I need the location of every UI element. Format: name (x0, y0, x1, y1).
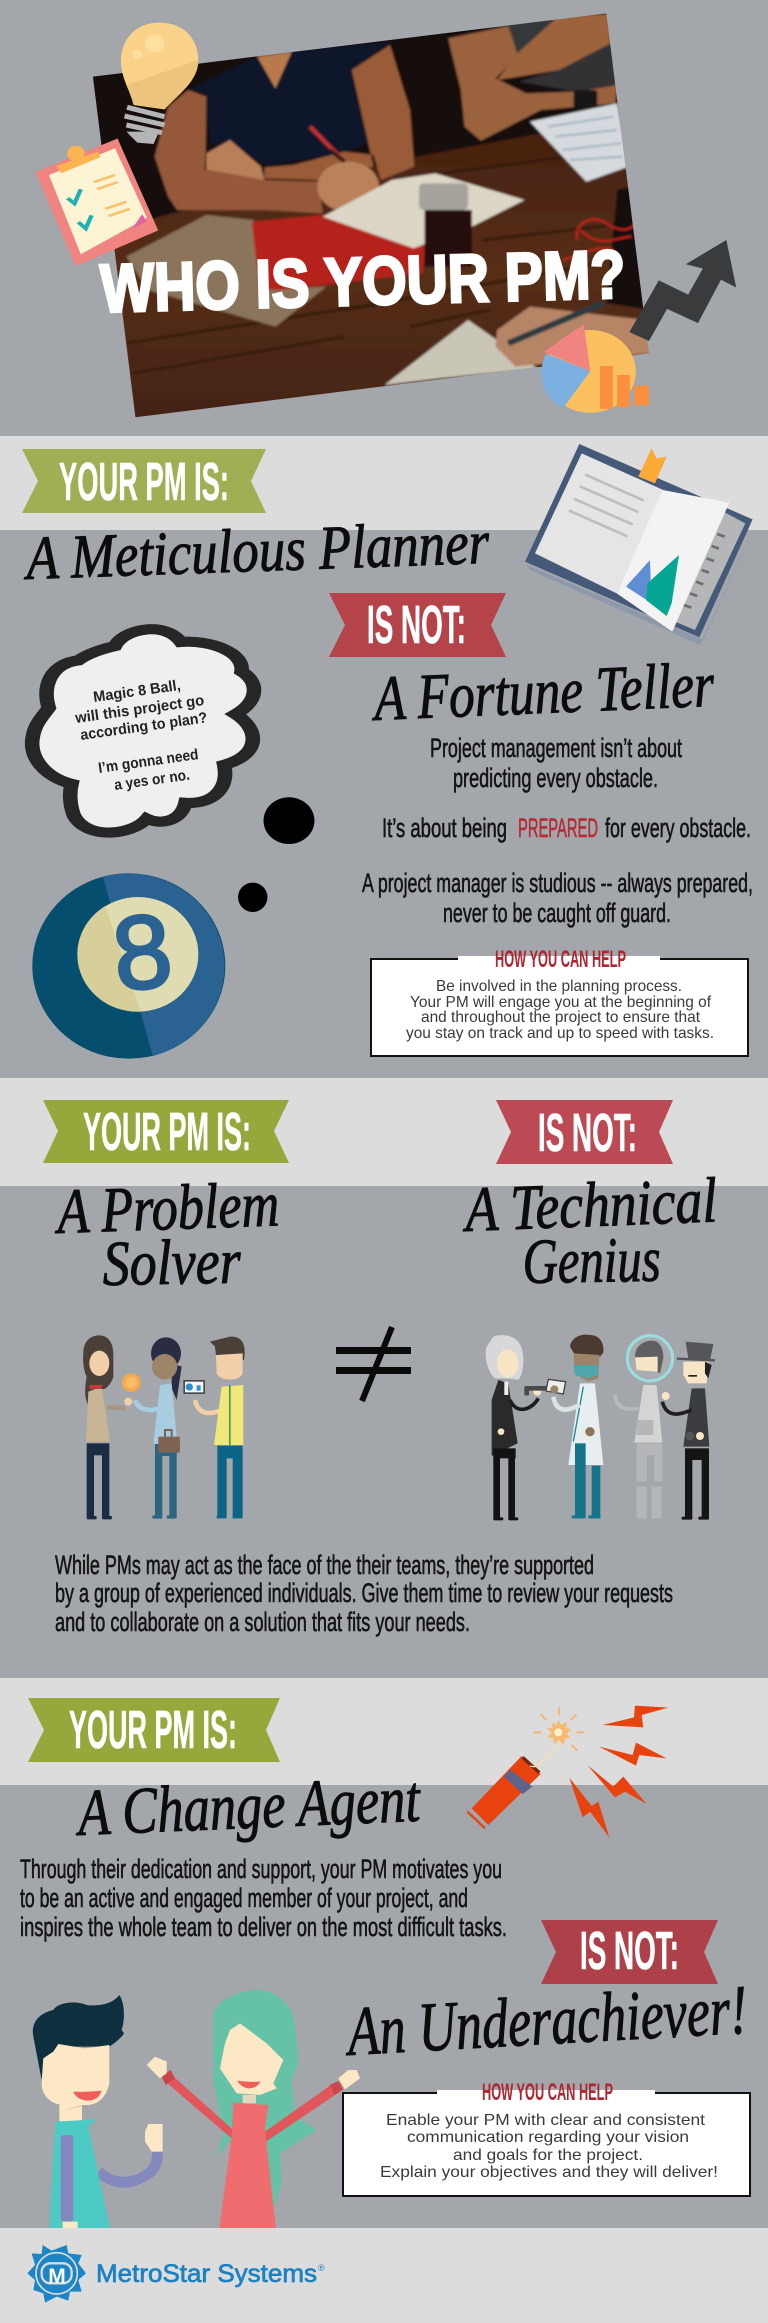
thought cloud: I’m gonna need (97, 746, 200, 777)
illustration: cheering man and woman (33, 1990, 360, 2228)
panel: problem solver vs technical genius (0, 1078, 768, 1637)
heading: a problem solver: Solver (102, 1226, 242, 1299)
banner: is not: IS NOT: (580, 1921, 679, 1981)
heading: a change agent: A Change Agent (73, 1763, 423, 1850)
text block: fortune teller explanation: predicting every obstacle. (453, 763, 658, 793)
callout: how you can help: and throughout the project to ensure that (421, 1009, 701, 1026)
logo: metrostar systems: ® (318, 2263, 325, 2273)
banner: is not: IS NOT: (367, 595, 466, 655)
banner: your pm is (28, 1698, 280, 1762)
banner: is not (496, 1100, 673, 1164)
heading: a technical genius: Genius (522, 1224, 661, 1297)
heading: a problem solver (53, 1168, 280, 1299)
text block: fortune teller explanation: PREPARED (518, 813, 598, 843)
thought cloud: will this project go (73, 692, 205, 727)
callout: how you can help: and goals for the project. (453, 2147, 643, 2164)
callout: how you can help: HOW YOU CAN HELP (482, 2079, 613, 2106)
band (0, 1078, 768, 1186)
panel: meticulous planner (0, 436, 768, 1059)
callout: how you can help: you stay on track and up to speed with tasks. (406, 1025, 714, 1042)
text block: fortune teller explanation (362, 733, 753, 928)
thought cloud: a yes or no. (113, 767, 191, 794)
logo: metrostar systems: MetroStar Systems (96, 2260, 317, 2288)
logo: metrostar systems (27, 2245, 325, 2303)
panel: change agent (0, 1678, 768, 2228)
text block: change agent explanation: to be an active and engaged member of your project, and (20, 1883, 468, 1913)
icon: rising arrow (629, 240, 736, 341)
thought cloud: according to plan? (79, 709, 208, 744)
text block: change agent explanation: Through their dedication and support, your PM motivates you (20, 1854, 502, 1884)
heading: a technical genius (460, 1164, 718, 1297)
banner: your pm is (22, 449, 266, 513)
banner: your pm is (43, 1100, 289, 1163)
heading: a technical genius: A Technical (460, 1164, 718, 1245)
callout: how you can help: Be involved in the planning process. (436, 978, 682, 995)
banner: your pm is: YOUR PM IS: (83, 1102, 251, 1162)
banner: is not (541, 1920, 718, 1984)
icon: not equal sign (336, 1327, 411, 1401)
logo: metrostar systems: M (48, 2265, 66, 2288)
banner: your pm is: YOUR PM IS: (69, 1700, 237, 1760)
footer (0, 2228, 768, 2323)
icon: magic 8 ball (32, 873, 225, 1059)
banner: is not: IS NOT: (538, 1103, 637, 1163)
thought cloud (32, 629, 254, 833)
photo: team meeting around a table (90, 10, 672, 427)
title: WHO IS YOUR PM? (99, 236, 626, 327)
callout: how you can help: Enable your PM with clear and consistent (386, 2112, 706, 2129)
callout: how you can help (371, 946, 748, 1056)
thought bubble dots (238, 797, 314, 912)
heading: a problem solver: A Problem (53, 1168, 280, 1247)
heading: a meticulous planner: A Meticulous Planner (22, 509, 491, 593)
text block: problem solver explanation: and to collaborate on a solution that fits your needs. (55, 1607, 470, 1637)
icon: clipboard (35, 139, 158, 266)
banner: your pm is: YOUR PM IS: (59, 452, 229, 512)
callout: how you can help: communication regarding your vision (407, 2129, 689, 2146)
callout: how you can help: Explain your objectives and they will deliver! (380, 2164, 718, 2181)
text block: fortune teller explanation: It’s about being (382, 813, 507, 843)
banner: is not (329, 593, 506, 657)
callout: how you can help (343, 2079, 750, 2196)
callout: how you can help: HOW YOU CAN HELP (495, 946, 626, 973)
illustration: technical geniuses (486, 1335, 715, 1520)
illustration: problem solving team (83, 1335, 245, 1519)
band (0, 2228, 768, 2323)
icon: open book (525, 444, 755, 645)
text block: problem solver explanation (55, 1550, 673, 1637)
text block: change agent explanation: inspires the whole team to deliver on the most difficult tasks. (20, 1912, 507, 1942)
panel: header photo with title (35, 10, 736, 427)
icon: magic 8 ball: 8 (107, 892, 177, 1014)
icon: dynamite with lightning (467, 1706, 668, 1837)
icon: pie chart (541, 324, 649, 413)
band (0, 1678, 768, 1785)
thought cloud: Magic 8 Ball, (92, 677, 182, 706)
icon: light bulb (121, 23, 198, 144)
callout: how you can help: Your PM will engage you at the beginning of (410, 994, 712, 1011)
band (0, 436, 768, 530)
text block: change agent explanation (20, 1854, 507, 1942)
